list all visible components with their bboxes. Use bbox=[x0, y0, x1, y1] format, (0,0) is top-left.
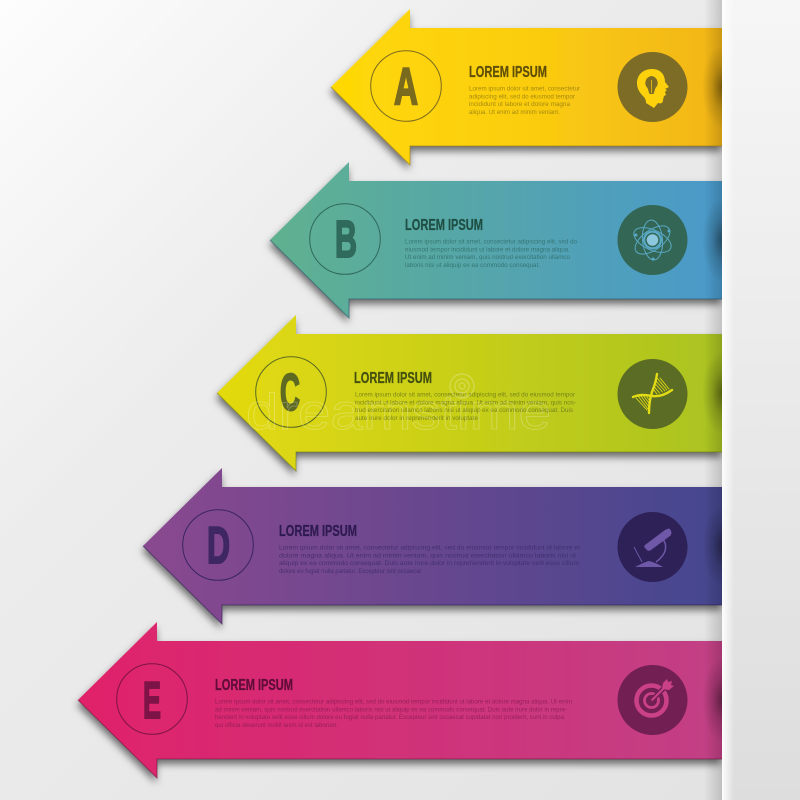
body text E: henderit in voluptate velit esse cillum dolore eu fugiat nulla pariatur. Excepteur sint occaecat cupidatat non proident, sunt in culpa bbox=[215, 714, 564, 721]
letter badge A bbox=[371, 51, 441, 121]
arrow E fold shading bbox=[702, 658, 742, 742]
letter badge C: C bbox=[280, 364, 300, 422]
right side panel bbox=[722, 0, 800, 800]
body text E bbox=[215, 698, 572, 729]
icon: atom bbox=[618, 205, 688, 275]
heading B: LOREM IPSUM bbox=[405, 217, 483, 234]
body text B bbox=[405, 238, 577, 269]
icon: target with arrow bbox=[618, 665, 688, 735]
arrow D bbox=[143, 468, 742, 624]
heading C: LOREM IPSUM bbox=[354, 370, 432, 387]
arrow D fold shading bbox=[702, 504, 742, 588]
panel edge shadow bbox=[704, 0, 722, 800]
body text B: Lorem ipsum dolor sit amet, consectetur adipiscing elit, sed do bbox=[405, 238, 577, 246]
body text C: incididunt ut labore et dolore magna aliqua. Ut enim ad minim veniam, quis nos- bbox=[355, 399, 576, 406]
letter badge D: D bbox=[207, 517, 230, 575]
body text B: Ut enim ad minim veniam, quis nostrud exercitation ullamco bbox=[405, 254, 570, 261]
body text C: aute irure dolor in reprehenderit in voluptate bbox=[355, 415, 478, 422]
body text C: trud exercitation ullamco laboris nisi ut aliquip ex ea commodo consequat. Duis bbox=[355, 407, 574, 414]
heading E: LOREM IPSUM bbox=[215, 677, 293, 694]
body text E: ad minim veniam, quis nostrud exercitation ullamco laboris nisi ut aliquip ex ea commodo consequat. Duis aute irure dolor in repre- bbox=[215, 706, 567, 713]
arrow E bbox=[78, 622, 742, 778]
arrow B fold shading bbox=[702, 198, 742, 282]
body text D bbox=[279, 544, 580, 575]
arrow C fold shading bbox=[702, 351, 742, 435]
heading A: LOREM IPSUM bbox=[469, 64, 547, 81]
body text E: Lorem ipsum dolor sit amet, consectetur adipiscing elit, sed do eiusmod tempor incididunt ut labore et dolore magna aliqua. Ut enim bbox=[215, 698, 572, 706]
arrow A fold shading bbox=[702, 45, 742, 129]
body text C: Lorem ipsum dolor sit amet, consectetur adipiscing elit, sed do eiusmod tempor bbox=[355, 392, 576, 398]
letter badge E bbox=[117, 664, 187, 734]
body text D: dolore eu fugiat nulla pariatur. Excepteur sint occaecat bbox=[279, 568, 421, 575]
panel highlight bbox=[722, 0, 734, 800]
arrow D shape bbox=[143, 468, 722, 624]
letter badge A: A bbox=[394, 58, 418, 116]
arrow A shape bbox=[331, 9, 722, 165]
heading D: LOREM IPSUM bbox=[279, 523, 357, 540]
letter badge D bbox=[183, 510, 253, 580]
body text D: Lorem ipsum dolor sit amet, consectetur adipiscing elit, sed do eiusmod tempor incididunt ut labore et bbox=[279, 544, 580, 552]
watermark: dreamstime bbox=[246, 384, 551, 440]
icon: dna helix bbox=[618, 359, 688, 429]
body text D: dolore magna aliqua. Ut enim ad minim veniam, quis nostrud exercitation ullamco laboris nisi ut bbox=[279, 552, 576, 559]
arrow B bbox=[270, 162, 742, 318]
body text E: qui officia deserunt mollit anim id est laborum. bbox=[215, 722, 338, 729]
body text B: laboris nisi ut aliquip ex ea commodo consequat. bbox=[405, 262, 540, 269]
body text C bbox=[355, 392, 576, 422]
arrow B shape bbox=[270, 162, 722, 318]
letter badge B: B bbox=[335, 211, 357, 269]
body text A: incididunt ut labore et dolore magna bbox=[469, 101, 570, 108]
letter badge C bbox=[256, 357, 326, 427]
body text A bbox=[469, 86, 581, 116]
body text A: Lorem ipsum dolor sit amet, consectetur bbox=[469, 86, 581, 92]
arrow E shape bbox=[78, 622, 722, 778]
arrow C shape bbox=[217, 315, 722, 471]
icon: head with light bulb bbox=[618, 52, 688, 122]
arrow C bbox=[217, 315, 742, 471]
icon: microscope bbox=[618, 512, 688, 582]
body text A: aliqua. Ut enim ad minim veniam. bbox=[469, 109, 560, 116]
body text D: aliquip ex ea commodo consequat. Duis aute irure dolor in reprehenderit in voluptate velit esse cillum bbox=[279, 560, 580, 567]
body text B: eiusmod tempor incididunt ut labore et dolore magna aliqua. bbox=[405, 246, 570, 253]
arrow A bbox=[331, 9, 742, 165]
letter badge E: E bbox=[143, 672, 161, 730]
body text A: adipiscing elit, sed do eiusmod tempor bbox=[469, 93, 576, 100]
letter badge B bbox=[310, 204, 380, 274]
